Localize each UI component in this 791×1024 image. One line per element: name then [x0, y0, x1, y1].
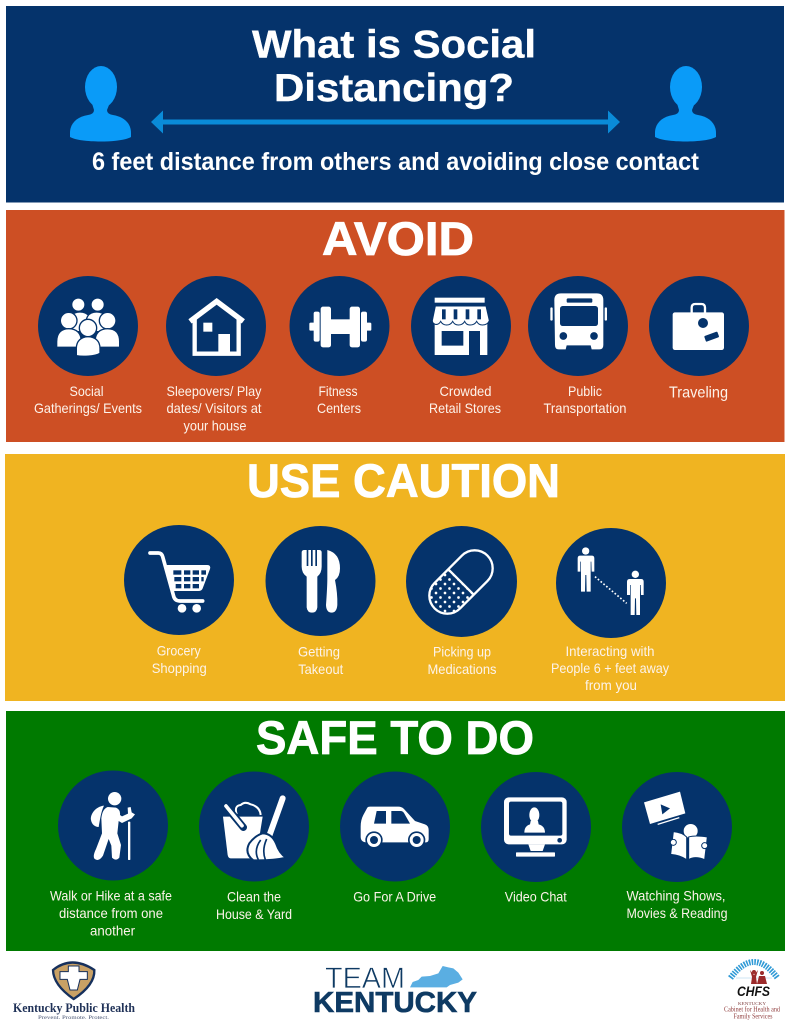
icon: kentucky state shape — [410, 966, 463, 987]
icon: family figures — [750, 970, 767, 984]
label: clean the house and yard — [216, 889, 292, 922]
arrow: six feet distance — [151, 110, 620, 134]
subtitle: 6 feet distance from others and avoiding close contact — [92, 148, 700, 176]
logo: kentucky public health: Kentucky Public Health — [13, 1000, 136, 1015]
label: social gatherings: Gatherings/ Events — [34, 400, 142, 416]
panel: avoid — [6, 210, 784, 442]
label: walk or hike: Walk or Hike at a safe — [50, 888, 172, 904]
item: traveling suitcase — [649, 276, 749, 376]
label: clean the house and yard: House & Yard — [216, 906, 292, 922]
label: crowded retail stores: Crowded — [440, 383, 492, 399]
title — [252, 24, 536, 110]
label: getting takeout: Getting — [298, 644, 340, 660]
label: social gatherings — [34, 383, 142, 416]
icon: shield — [53, 962, 94, 999]
label: public transportation: Public — [568, 383, 602, 399]
label: interacting with people — [551, 643, 669, 693]
item: takeout fork and knife — [266, 526, 376, 636]
label: social gatherings: Social — [70, 383, 104, 399]
logo: team kentucky: KENTUCKY — [313, 987, 477, 1019]
label: fitness centers: Fitness — [318, 383, 358, 399]
icon: blue arc — [730, 962, 778, 978]
logo: chfs: KENTUCKY — [738, 1001, 767, 1006]
label: picking up medications: Picking up — [433, 644, 491, 660]
icon: left person — [70, 66, 131, 142]
label: sleepovers — [166, 383, 262, 434]
label: watching shows movies reading: Movies & Reading — [626, 905, 728, 921]
item: video chat monitor — [481, 772, 591, 882]
heading: safe to do: SAFE TO DO — [256, 711, 534, 764]
item: retail store — [411, 276, 511, 376]
label: clean the house and yard: Clean the — [227, 889, 281, 905]
label: picking up medications — [428, 644, 496, 677]
logo: chfs — [724, 962, 780, 1020]
label: interacting with people: from you — [585, 677, 637, 693]
label: fitness centers: Centers — [317, 400, 361, 416]
label: public transportation — [544, 383, 626, 416]
logo: chfs: Family Services — [734, 1012, 773, 1020]
label: crowded retail stores — [429, 383, 501, 416]
panel: use caution — [5, 454, 785, 701]
item: grocery cart — [124, 525, 234, 635]
label: interacting with people: People 6 + feet away — [551, 660, 669, 676]
label: go for a drive: Go For A Drive — [353, 889, 436, 905]
label: traveling: Traveling — [669, 384, 728, 402]
item: public transportation bus — [528, 276, 628, 376]
label: grocery shopping: Grocery — [157, 643, 201, 659]
logo: kentucky public health: Prevent. Promote. Protect. — [38, 1015, 110, 1021]
label: crowded retail stores: Retail Stores — [429, 400, 501, 416]
label: grocery shopping: Shopping — [152, 660, 207, 676]
title: Distancing? — [274, 67, 514, 110]
heading: avoid: AVOID — [322, 212, 474, 265]
label: sleepovers: your house — [184, 418, 247, 434]
label: sleepovers: dates/ Visitors at — [166, 400, 262, 416]
logo: chfs: Cabinet for Health and — [724, 1006, 780, 1014]
item: social gatherings — [38, 276, 138, 376]
label: picking up medications: Medications — [428, 661, 496, 677]
label: walk or hike: distance from one — [59, 905, 163, 921]
label: sleepovers: Sleepovers/ Play — [166, 383, 262, 399]
label: watching shows movies reading: Watching Shows, — [626, 888, 726, 904]
label: watching shows movies reading — [626, 888, 728, 921]
heading: use caution: USE CAUTION — [247, 454, 560, 507]
logo: team kentucky — [313, 962, 477, 1019]
label: walk or hike: another — [90, 923, 135, 939]
label: fitness centers — [317, 383, 361, 416]
item: sleepovers house — [166, 276, 266, 376]
label: getting takeout: Takeout — [298, 661, 343, 677]
item: walk or hike — [58, 770, 168, 880]
label: getting takeout — [298, 644, 343, 677]
icon: right person — [655, 66, 716, 142]
panel: safe to do — [6, 711, 785, 951]
label: public transportation: Transportation — [544, 400, 626, 416]
item: watching shows and reading — [622, 772, 732, 882]
item: fitness centers dumbbell — [290, 276, 390, 376]
panel: header — [6, 6, 784, 202]
label: grocery shopping — [152, 643, 207, 676]
item: clean house and yard — [199, 772, 309, 882]
label: walk or hike — [50, 888, 172, 939]
label: interacting with people: Interacting with — [566, 643, 654, 659]
label: video chat: Video Chat — [505, 889, 567, 905]
logo: kentucky public health — [13, 962, 136, 1021]
item: go for a drive car — [340, 772, 450, 882]
logo: chfs: CHFS — [737, 984, 770, 999]
logo: team kentucky: TEAM — [325, 962, 405, 995]
title: What is Social — [252, 24, 536, 66]
item: interacting six feet away — [556, 528, 666, 638]
item: medications pill — [406, 526, 517, 637]
